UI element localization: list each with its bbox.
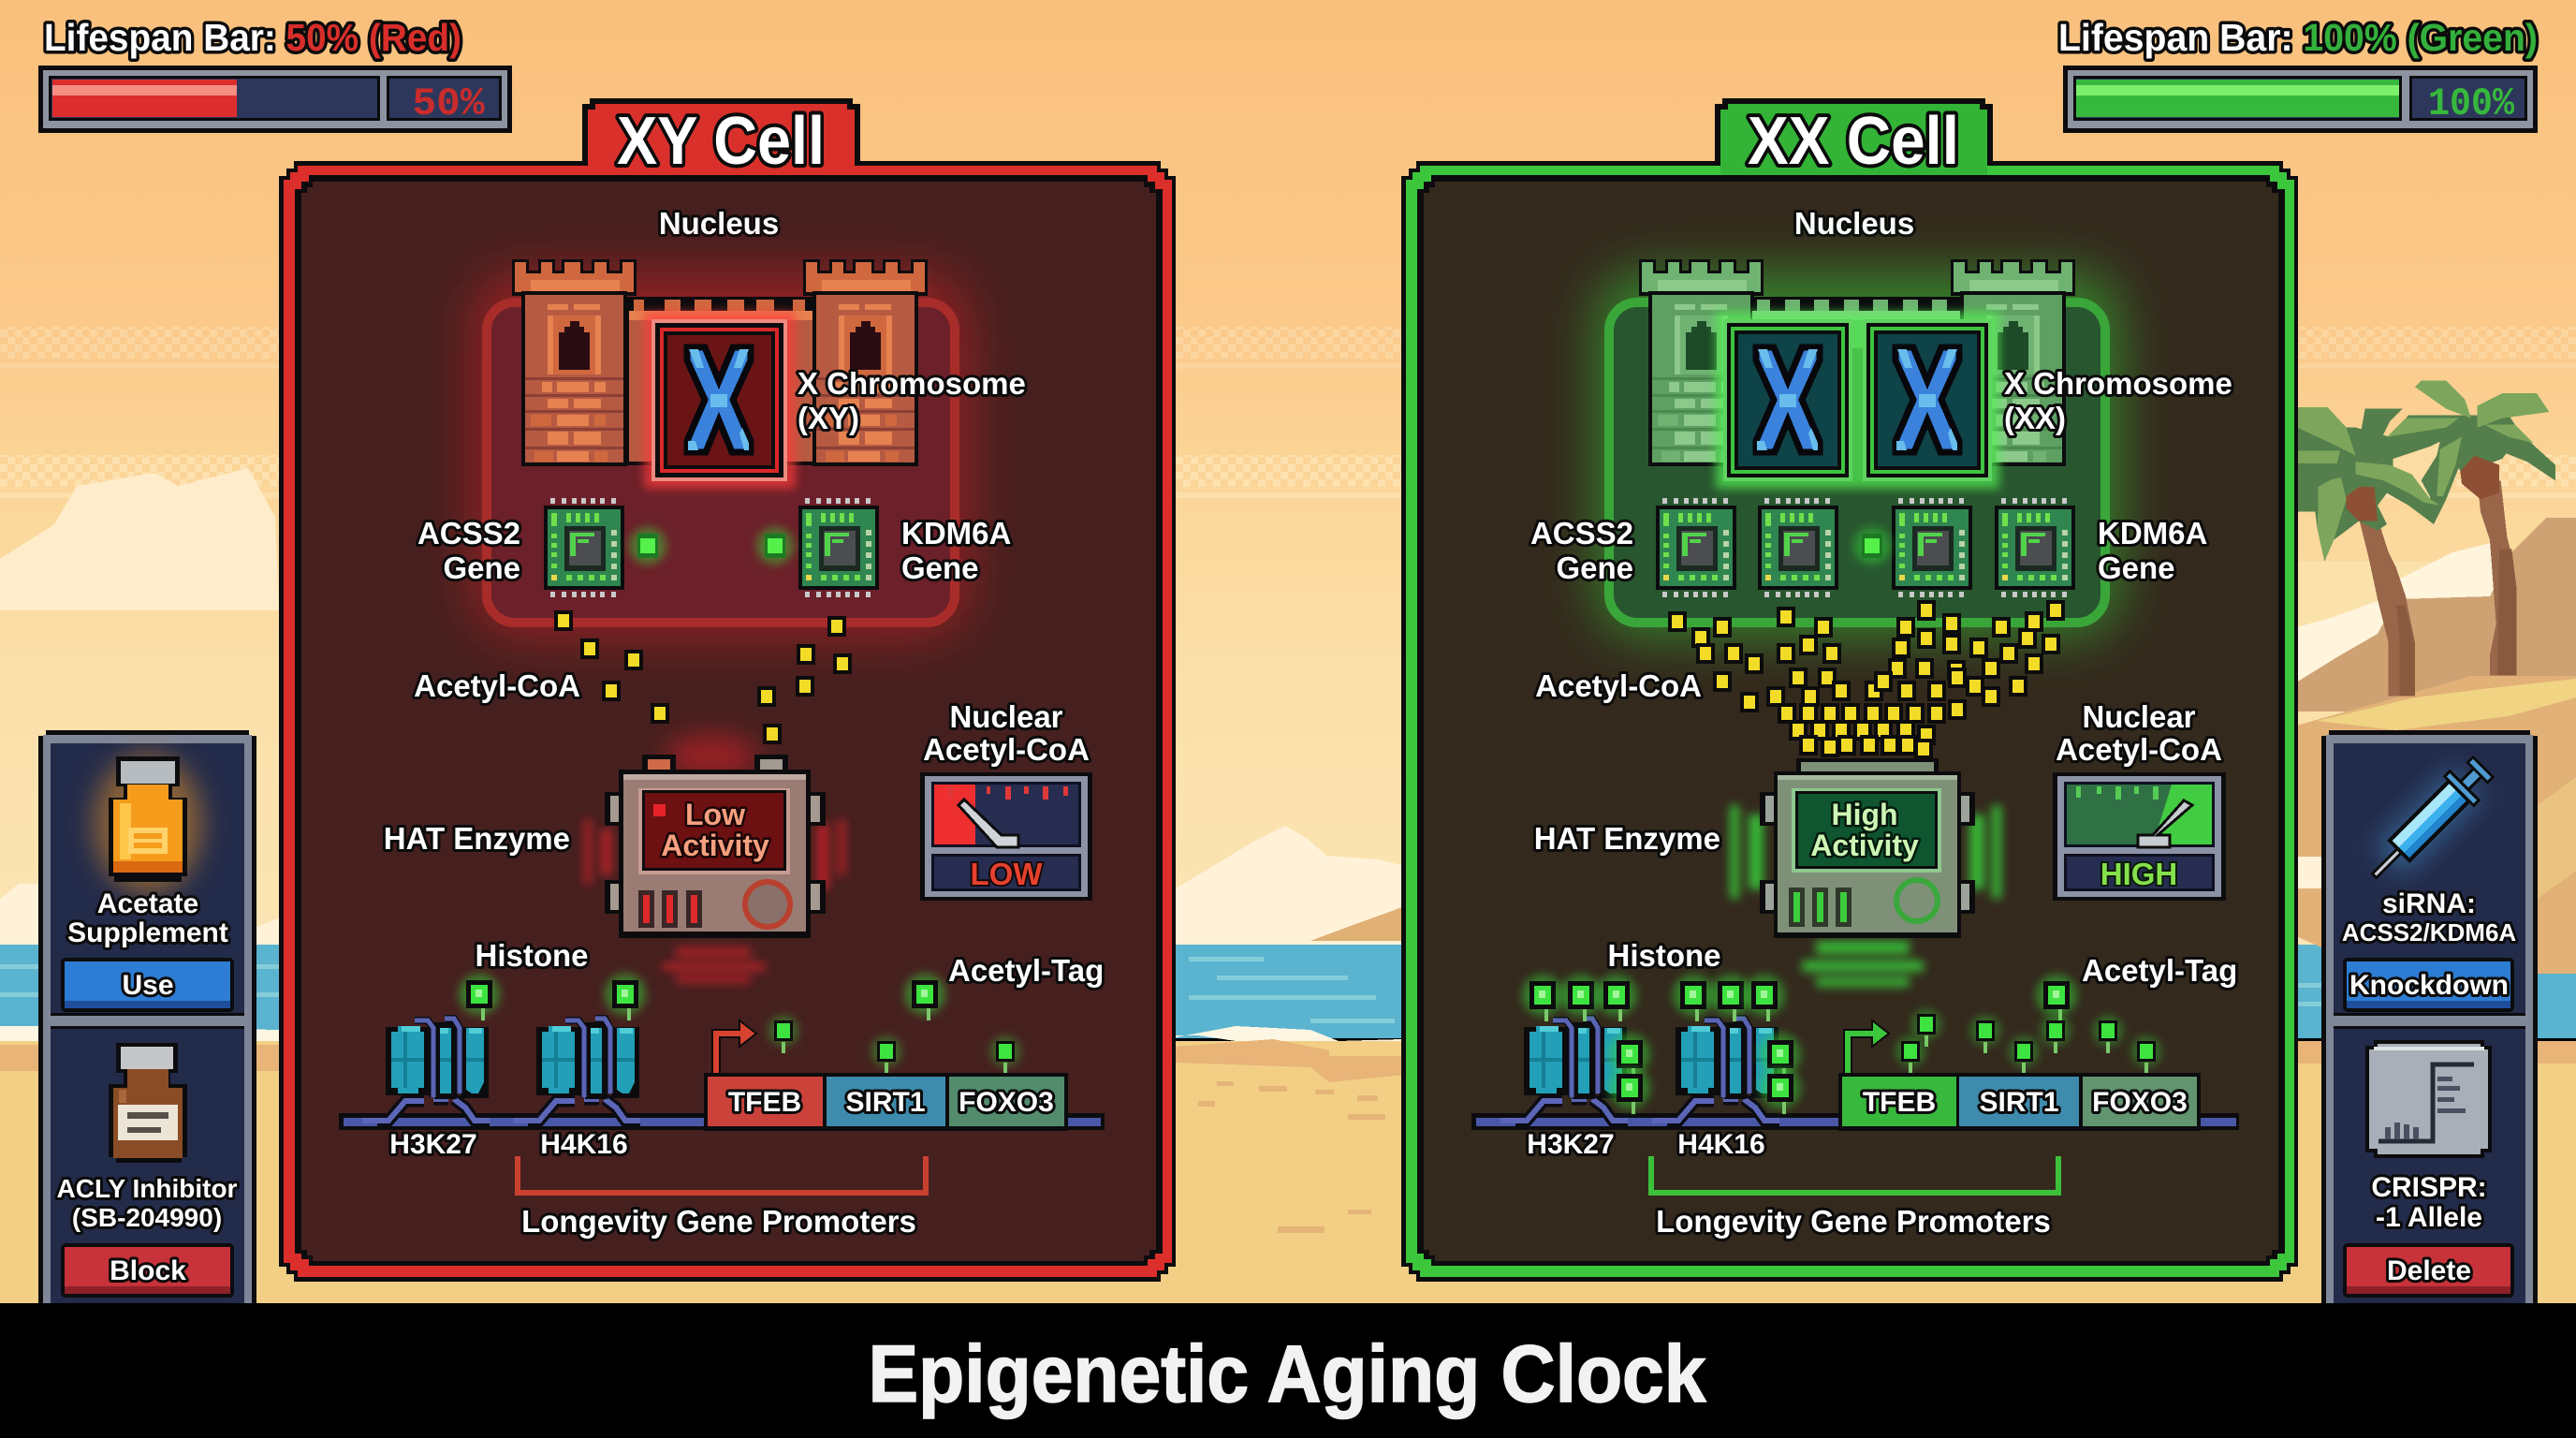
icon: palm trees bbox=[2297, 381, 2555, 696]
arrow: transcription start bbox=[712, 1020, 756, 1076]
promoter genes: SIRT1 bbox=[845, 1087, 926, 1118]
button: knockdown: Knockdown bbox=[2349, 970, 2509, 1001]
gauge: low bbox=[920, 772, 1092, 901]
HAT enzyme machine: Activity bbox=[661, 829, 769, 862]
label: ACSS2 gene: ACSS2 bbox=[417, 516, 520, 550]
icon: syringe bbox=[2360, 753, 2497, 890]
label: ACSS2 gene: Gene bbox=[1556, 550, 1633, 585]
HAT enzyme machine: Low bbox=[685, 798, 745, 831]
bracket bbox=[1651, 1156, 2058, 1193]
label: KDM6A gene: KDM6A bbox=[901, 516, 1011, 550]
label: CRISPR: CRISPR: bbox=[2371, 1172, 2487, 1203]
nucleus bbox=[473, 259, 969, 637]
icon: castle bbox=[512, 259, 928, 466]
label: siRNA: ACSS2/KDM6A bbox=[2342, 918, 2516, 946]
acetyl-CoA particles bbox=[1670, 602, 2063, 757]
lifespan status: XX bbox=[2058, 16, 2538, 133]
gauge: high: HIGH bbox=[2100, 857, 2177, 891]
label: histone: Histone bbox=[475, 938, 589, 973]
label: X chromosome XY: (XY) bbox=[798, 401, 859, 435]
panel: left item tray bbox=[38, 730, 256, 1315]
label: ACLY inhibitor: (SB-204990) bbox=[72, 1203, 222, 1232]
button: use bbox=[61, 958, 234, 1012]
X chromosome box bbox=[644, 312, 796, 489]
promoter genes bbox=[1838, 1073, 2201, 1131]
label: KDM6A gene: Gene bbox=[2098, 550, 2175, 585]
label: ACLY inhibitor: ACLY Inhibitor bbox=[57, 1174, 237, 1203]
label: ACSS2 gene: ACSS2 bbox=[1530, 516, 1633, 550]
panel: right item tray bbox=[2321, 730, 2538, 1315]
button: use: Use bbox=[122, 970, 174, 1001]
gene chips bbox=[1656, 498, 2075, 597]
HAT enzyme machine: High bbox=[1831, 798, 1898, 831]
panel: XY cell bbox=[279, 98, 1176, 1282]
panel: XX cell bbox=[1401, 98, 2298, 1282]
button: block: Block bbox=[110, 1255, 186, 1286]
label: longevity gene promoters: Longevity Gene Promoters bbox=[521, 1204, 916, 1239]
label: longevity gene promoters: Longevity Gene Promoters bbox=[1656, 1204, 2051, 1239]
nucleosome H3K27 bbox=[362, 1019, 490, 1121]
tab: XX cell: XX Cell bbox=[1748, 104, 1959, 179]
label: lifespan bar XX: Lifespan Bar: 100% (Green) bbox=[2058, 16, 2538, 59]
icon: ACLY inhibitor bottle bbox=[109, 1043, 187, 1163]
promoter genes: TFEB bbox=[728, 1087, 801, 1118]
label: H4K16: H4K16 bbox=[1677, 1129, 1765, 1160]
label: siRNA: siRNA: bbox=[2382, 888, 2476, 919]
icon: castle bbox=[1639, 259, 2075, 466]
X chromosome boxes bbox=[1716, 312, 1999, 489]
lifespan bar XX bbox=[2063, 66, 2538, 133]
label: nuclear acetyl-CoA: Nuclear bbox=[2082, 699, 2196, 734]
label: acetyl-CoA: Acetyl-CoA bbox=[414, 668, 580, 703]
acetyl-CoA particles bbox=[556, 612, 850, 742]
promoter genes: SIRT1 bbox=[1979, 1087, 2059, 1118]
HAT enzyme machine bbox=[584, 734, 845, 983]
gene chip KDM6A bbox=[798, 498, 879, 597]
label: KDM6A gene: Gene bbox=[901, 550, 979, 585]
title bar: Epigenetic Aging Clock bbox=[869, 1329, 1706, 1419]
bracket bbox=[518, 1156, 926, 1193]
DNA strand bbox=[1471, 1113, 2239, 1130]
label: H4K16: H4K16 bbox=[540, 1129, 628, 1160]
label: X chromosome XY: X Chromosome bbox=[798, 366, 1026, 401]
label: HAT enzyme: HAT Enzyme bbox=[384, 821, 570, 856]
promoter genes: FOXO3 bbox=[959, 1087, 1054, 1118]
label: KDM6A gene: KDM6A bbox=[2098, 516, 2207, 550]
icon: acetate bottle bbox=[94, 754, 202, 894]
lifespan bar XY bbox=[38, 66, 512, 133]
label: acetyl-tag: Acetyl-Tag bbox=[2082, 953, 2237, 988]
label: CRISPR: -1 Allele bbox=[2376, 1202, 2482, 1233]
promoter genes: TFEB bbox=[1863, 1087, 1936, 1118]
label: H3K27: H3K27 bbox=[1527, 1129, 1615, 1160]
button: knockdown bbox=[2343, 958, 2514, 1012]
acetyl tags bbox=[1522, 975, 2161, 1114]
label: acetyl-CoA: Acetyl-CoA bbox=[1535, 668, 1702, 703]
icon: CRISPR bbox=[2365, 1040, 2492, 1158]
label: nuclear acetyl-CoA: Nuclear bbox=[949, 699, 1063, 734]
button: delete: Delete bbox=[2387, 1255, 2471, 1286]
title bar bbox=[0, 1303, 2576, 1438]
label: acetate supplement: Acetate bbox=[97, 888, 198, 919]
label: nuclear acetyl-CoA: Acetyl-CoA bbox=[923, 732, 1090, 767]
LED right bbox=[756, 527, 794, 565]
HAT enzyme machine bbox=[1730, 758, 2001, 987]
gene chip ACSS2 bbox=[544, 498, 624, 597]
label: H3K27: H3K27 bbox=[389, 1129, 477, 1160]
label: X chromosome XX: X Chromosome bbox=[2004, 366, 2232, 401]
promoter genes: FOXO3 bbox=[2092, 1087, 2188, 1118]
button: delete bbox=[2343, 1243, 2514, 1298]
LED center bbox=[1853, 527, 1891, 565]
nucleosome H4K16 bbox=[513, 1019, 640, 1121]
label: X chromosome XX: (XX) bbox=[2004, 401, 2066, 435]
label: nucleus: Nucleus bbox=[659, 206, 779, 241]
lifespan status: XY bbox=[38, 16, 512, 133]
label: ACSS2 gene: Gene bbox=[443, 550, 520, 585]
label: lifespan bar XY: Lifespan Bar: 50% (Red) bbox=[44, 16, 461, 59]
nucleosome H4K16 bbox=[1652, 1019, 1779, 1121]
lifespan bar XY: 50% bbox=[412, 81, 485, 126]
arrow: transcription start bbox=[1844, 1020, 1889, 1076]
button: block bbox=[61, 1243, 234, 1298]
DNA strand bbox=[339, 1113, 1105, 1130]
label: acetate supplement: Supplement bbox=[67, 917, 228, 948]
acetyl tags bbox=[459, 974, 1020, 1074]
promoter genes bbox=[704, 1073, 1068, 1131]
label: HAT enzyme: HAT Enzyme bbox=[1534, 821, 1720, 856]
gauge: low: LOW bbox=[971, 857, 1043, 891]
HAT enzyme machine: Activity bbox=[1810, 829, 1919, 862]
lifespan bar XX: 100% bbox=[2428, 81, 2515, 126]
gauge: high bbox=[2053, 772, 2226, 901]
label: histone: Histone bbox=[1607, 938, 1721, 973]
nucleosome H3K27 bbox=[1500, 1019, 1628, 1121]
LED left bbox=[629, 527, 666, 565]
label: nuclear acetyl-CoA: Acetyl-CoA bbox=[2056, 732, 2222, 767]
label: acetyl-tag: Acetyl-Tag bbox=[948, 953, 1104, 988]
tab: XY cell: XY Cell bbox=[617, 104, 825, 179]
nucleus bbox=[1596, 259, 2120, 637]
label: nucleus: Nucleus bbox=[1794, 206, 1914, 241]
